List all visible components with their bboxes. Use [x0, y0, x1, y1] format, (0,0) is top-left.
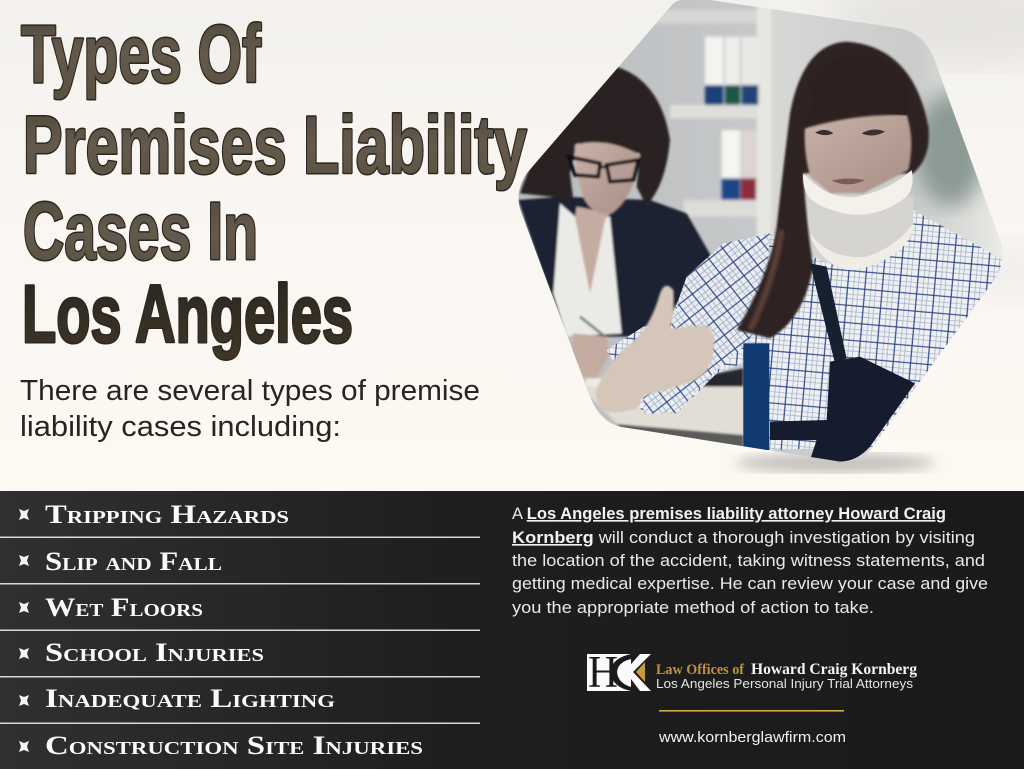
gold divider [659, 710, 844, 712]
face [805, 115, 911, 193]
attorney paragraph: Kornberg will conduct a thorough investigation by visiting [512, 529, 975, 547]
neck brace [803, 170, 913, 270]
item: construction site injuries: Construction Site Injuries [45, 731, 423, 760]
logo text: Howard Craig Kornberg [751, 661, 917, 678]
item: slip and fall [0, 547, 480, 584]
list of premises liability case types [0, 500, 480, 760]
title: Premises Liability [23, 100, 527, 191]
title: Types Of [21, 9, 261, 100]
long hair [737, 42, 929, 338]
lawyer woman [518, 65, 713, 378]
intro text: liability cases including: [20, 411, 341, 443]
website url: www.kornberglawfirm.com [658, 729, 846, 746]
dark panel [0, 491, 1024, 769]
item: tripping hazards: Tripping Hazards [45, 500, 289, 529]
intro text [20, 375, 480, 443]
attorney paragraph: you the appropriate method of action to take. [512, 599, 874, 617]
item: wet floors: Wet Floors [45, 593, 203, 622]
thumbs-up hand [595, 286, 714, 412]
background: hazy sky [0, 0, 1024, 492]
shelving and binders [656, 7, 985, 236]
attorney paragraph: getting medical expertise. He can review your case and give [512, 575, 988, 593]
title: Cases In [23, 186, 258, 277]
firm logo [587, 647, 917, 697]
item: school injuries: School Injuries [45, 638, 264, 667]
attorney paragraph [512, 505, 988, 617]
desk [577, 368, 743, 448]
intro text: There are several types of premise [20, 375, 480, 407]
photo shadow [735, 454, 935, 472]
shirt [607, 210, 1003, 450]
logo mark: HCK [587, 647, 651, 697]
item: school injuries [0, 638, 480, 678]
item: inadequate lighting [0, 684, 480, 724]
arm sling [743, 263, 915, 462]
logo text: Los Angeles Personal Injury Trial Attorneys [656, 676, 914, 691]
item: slip and fall: Slip and Fall [45, 547, 222, 576]
logo text: Law Offices of [656, 662, 744, 678]
photo: injured woman in neck brace with lawyer [510, 0, 1010, 470]
title: Los Angeles [22, 269, 353, 360]
item: tripping hazards [0, 500, 480, 538]
item: wet floors [0, 593, 480, 631]
title [21, 9, 527, 360]
attorney paragraph: A Los Angeles premises liability attorney Howard Craig [512, 505, 946, 523]
item: inadequate lighting: Inadequate Lighting [45, 684, 335, 713]
logo mark: HCK: H [588, 647, 618, 697]
logo text [656, 661, 917, 691]
attorney paragraph: the location of the accident, taking witness statements, and [512, 552, 985, 570]
